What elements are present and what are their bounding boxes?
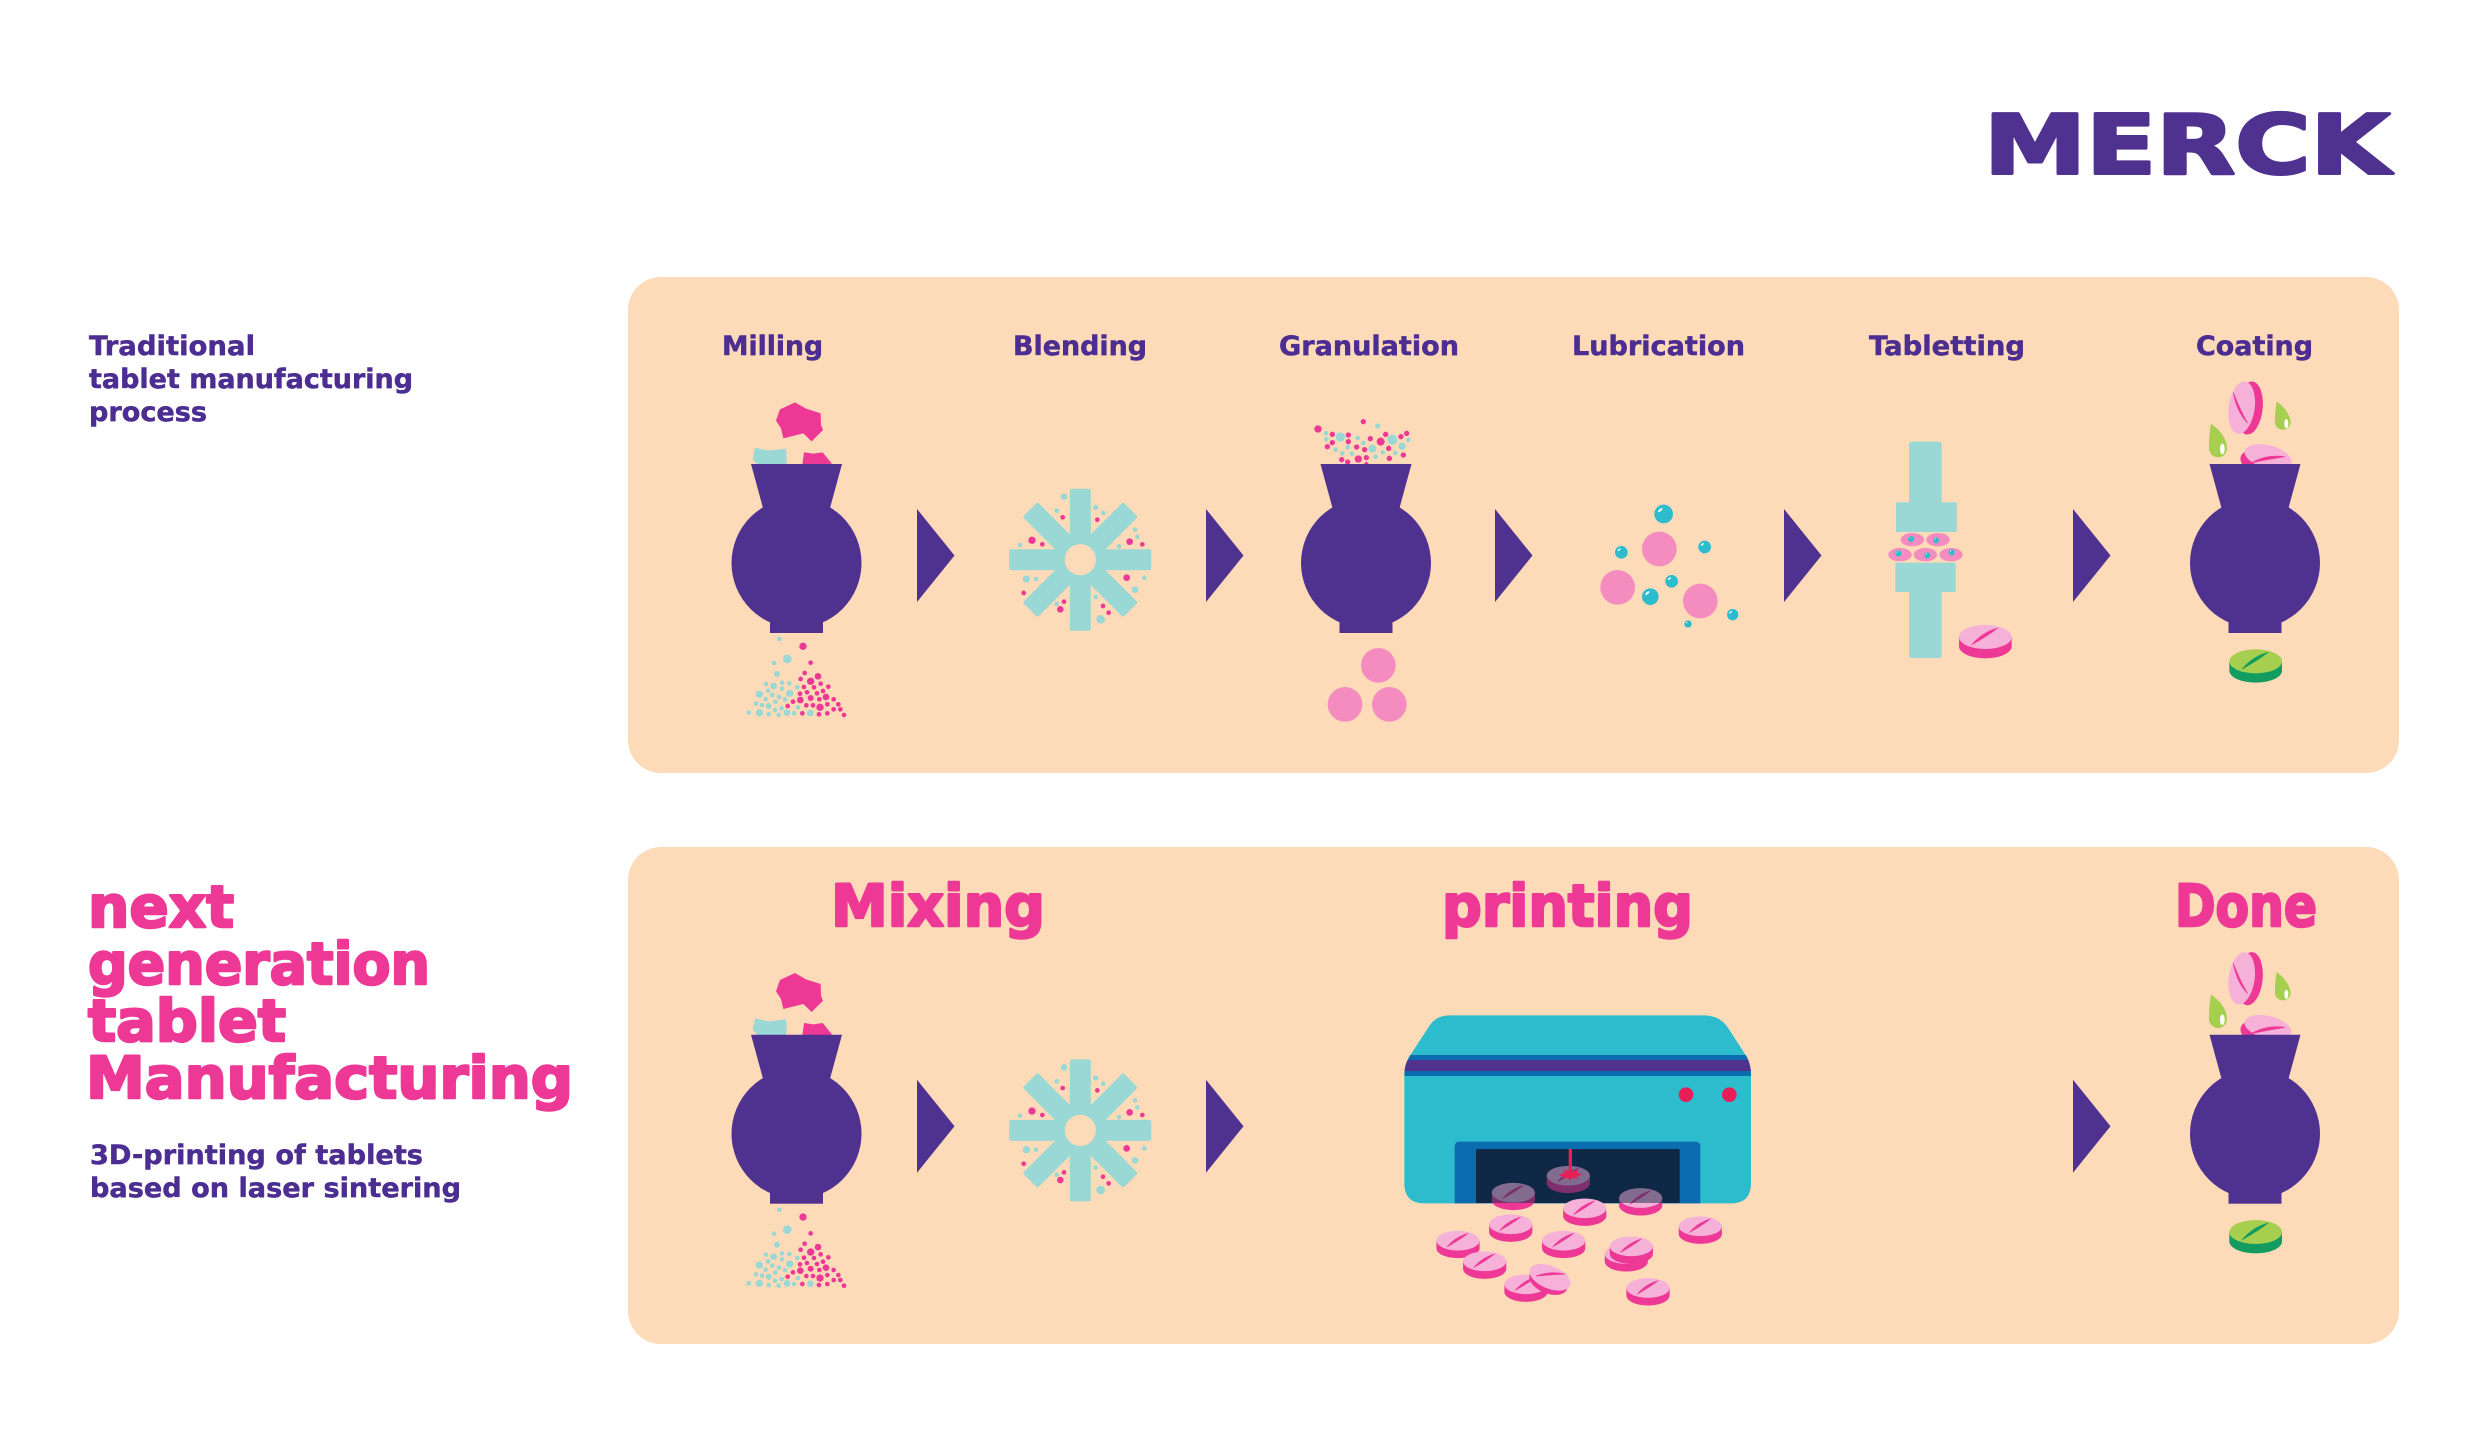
arrow: mixing to blending star — [917, 1080, 954, 1173]
text block: traditional process heading: process — [89, 397, 207, 428]
heading: next generation tablet manufacturing: next — [88, 873, 234, 941]
heading: next generation tablet manufacturing: Manufacturing — [86, 1044, 573, 1112]
text block: 3D-printing subtitle: 3D-printing of tablets — [90, 1140, 423, 1171]
icon: blending star — [1009, 489, 1151, 631]
step label: printing: printing — [1442, 872, 1693, 940]
text block: traditional process heading: Traditional — [89, 331, 255, 362]
icon: granulation vessel with granules — [1301, 419, 1431, 722]
step label: Done: Done — [2175, 872, 2317, 940]
step label: Tabletting: Tabletting — [1869, 331, 2025, 362]
step label: Coating: Coating — [2196, 331, 2313, 362]
heading: next generation tablet manufacturing: tablet — [88, 987, 286, 1055]
arrow: printer to done — [2073, 1080, 2110, 1173]
step label: Milling: Milling — [722, 331, 823, 362]
icon: mixing vessel with powder — [732, 973, 862, 1288]
icon: done vessel with tablets and drops — [2190, 950, 2320, 1253]
arrow: granulation to lubrication — [1495, 509, 1532, 602]
logo: Merck: MERCK — [1984, 98, 2394, 194]
icon: tablet press — [1888, 442, 2012, 658]
heading: next generation tablet manufacturing — [86, 873, 573, 1112]
text block: 3D-printing subtitle: based on laser sintering — [90, 1173, 461, 1204]
arrow: tabletting to coating — [2073, 509, 2110, 602]
step label: Granulation: Granulation — [1279, 331, 1459, 362]
icon: blending star — [1009, 1059, 1151, 1201]
step label: Blending: Blending — [1013, 331, 1147, 362]
text block: 3D-printing subtitle — [90, 1140, 461, 1204]
icon: milling vessel with powder — [732, 402, 862, 717]
text block: traditional process heading: tablet manufacturing — [89, 364, 413, 395]
text block: traditional process heading — [89, 331, 413, 428]
arrow: blending to printer — [1206, 1080, 1244, 1173]
icon: lubrication granules and droplets — [1600, 505, 1738, 628]
panel: traditional process — [628, 277, 2399, 773]
heading: next generation tablet manufacturing: generation — [88, 930, 430, 998]
arrow: lubrication to tabletting — [1784, 509, 1822, 602]
icon: coating vessel with tablets and drops — [2190, 380, 2320, 683]
icon: 3D printer with laser and tablets — [1400, 1015, 1757, 1305]
step label: Lubrication: Lubrication — [1572, 331, 1745, 362]
step label: Mixing: Mixing — [831, 872, 1045, 940]
arrow: milling to blending — [917, 509, 954, 602]
panel: next generation process — [628, 847, 2399, 1344]
arrow: blending to granulation — [1206, 509, 1244, 602]
